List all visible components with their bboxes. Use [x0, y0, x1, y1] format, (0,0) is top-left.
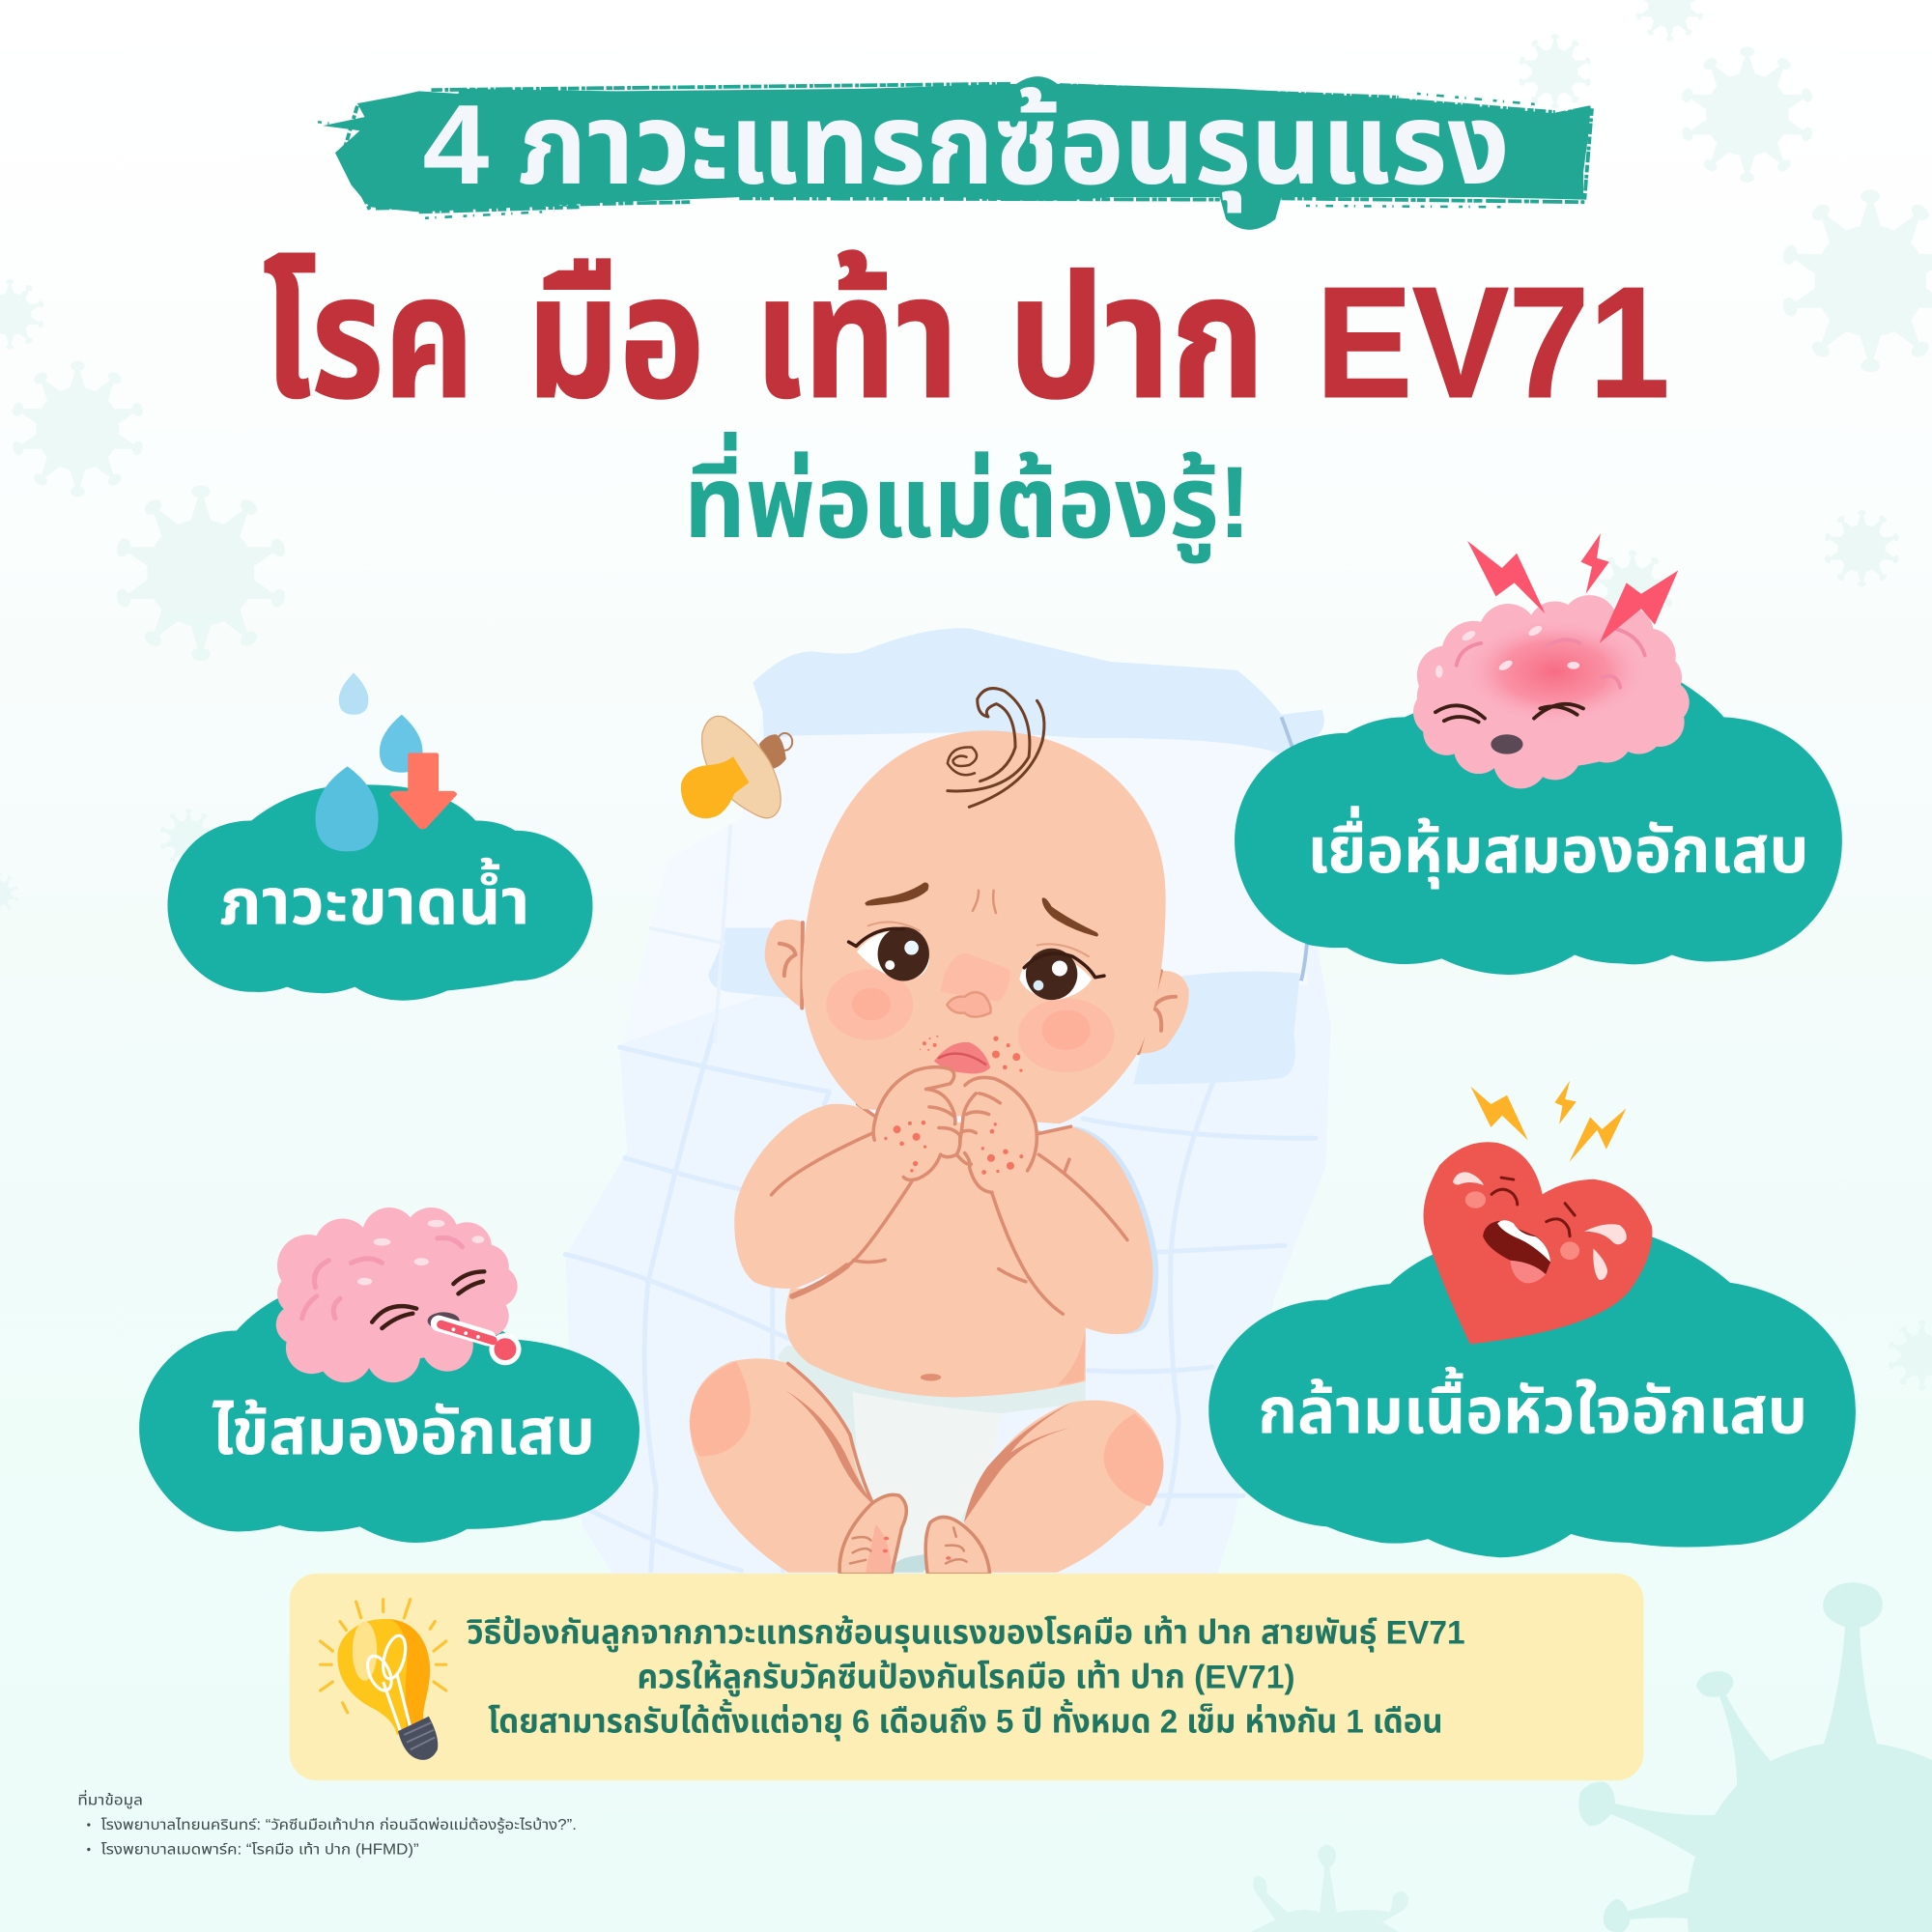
baby lower body: diaper, belly, legs and feet: [690, 1289, 1163, 1575]
cloud: myocarditis: [1208, 1233, 1856, 1557]
hand rash: [884, 1121, 1023, 1175]
virus: bottom centre: [1251, 1844, 1408, 1932]
title line 2: เท้า: [754, 241, 958, 434]
icon: brain with thermometer: [276, 1208, 522, 1382]
title line 1: ภาวะแทรกซ้อนรุนแรง: [518, 81, 1509, 213]
sources: ที่มาข้อมูล: [77, 1790, 143, 1809]
sources: [77, 1790, 577, 1859]
left eye: [849, 922, 929, 980]
mouth: [934, 1042, 990, 1073]
icon: crying heart with bolts: [1423, 1081, 1652, 1344]
head: [802, 730, 1166, 1123]
title line 2: โรค: [263, 241, 474, 434]
illustration: sick baby: [690, 689, 1189, 1575]
icon: water drops and down arrow: [316, 672, 457, 851]
title line 1: 4: [423, 81, 489, 208]
cloud: meningitis: [1235, 671, 1842, 975]
virus: large bottom right: [1578, 1582, 1932, 1932]
label: myocarditis: กล้ามเนื้อหัวใจอักเสบ: [1258, 1366, 1807, 1447]
icon: inflamed brain with bolts: [1413, 533, 1690, 788]
label: meningitis: เยื่อหุ้มสมองอักเสบ: [1307, 806, 1808, 889]
title line 2: มือ: [526, 241, 705, 434]
cheeks: [826, 969, 1115, 1072]
callout panel: [290, 1574, 1644, 1780]
label: dehydration: ภาวะขาดน้ำ: [219, 858, 529, 939]
cloud: dehydration: [167, 784, 593, 1001]
title line 2: [263, 241, 1669, 434]
callout text: โดยสามารถรับได้ตั้งแต่อายุ 6 เดือนถึง 5 ปี ทั้งหมด 2 เข็ม ห่างกัน 1 เดือน: [488, 1699, 1443, 1741]
title banner: brush stroke: [318, 76, 1592, 230]
nose: [941, 953, 1009, 1017]
virus: spike lower left of large virus: [1604, 1891, 1690, 1932]
sources: โรงพยาบาลไทยนครินทร์: “วัคซีนมือเท้าปาก ก่อนฉีดพ่อแม่ต้องรู้อะไรบ้าง?”.: [101, 1816, 577, 1833]
bedding: sheet and pillow: [565, 628, 1331, 1574]
icon: pacifier: [681, 716, 792, 818]
sources: โรงพยาบาลเมดพาร์ค: “โรคมือ เท้า ปาก (HFMD)”: [101, 1842, 419, 1859]
title line 2: ปาก: [1008, 241, 1265, 434]
title line 3: ที่พ่อแม่ต้องรู้!: [684, 432, 1251, 564]
hair curl: [948, 689, 1044, 807]
baby arms, chest and head: [734, 920, 1189, 1334]
left hand: [873, 1065, 960, 1180]
callout text: [467, 1615, 1465, 1741]
right eye: [1019, 944, 1104, 1000]
cloud: encephalitis: [139, 1298, 639, 1543]
brows: [865, 882, 1098, 936]
icon: light bulb: [321, 1600, 446, 1760]
face and hands: [826, 882, 1115, 1192]
callout text: ควรให้ลูกรับวัคซีนป้องกันโรคมือ เท้า ปาก (EV71): [637, 1659, 1295, 1696]
right hand: [960, 1079, 1037, 1192]
callout text: วิธีป้องกันลูกจากภาวะแทรกซ้อนรุนแรงของโรคมือ เท้า ปาก สายพันธุ์ EV71: [467, 1615, 1465, 1653]
finger lines: [873, 1067, 1037, 1192]
background virus pattern: [0, 0, 1932, 1390]
face rash: [920, 1036, 1023, 1072]
title line 2: EV71: [1316, 254, 1669, 431]
label: encephalitis: ไข้สมองอักเสบ: [212, 1397, 595, 1468]
